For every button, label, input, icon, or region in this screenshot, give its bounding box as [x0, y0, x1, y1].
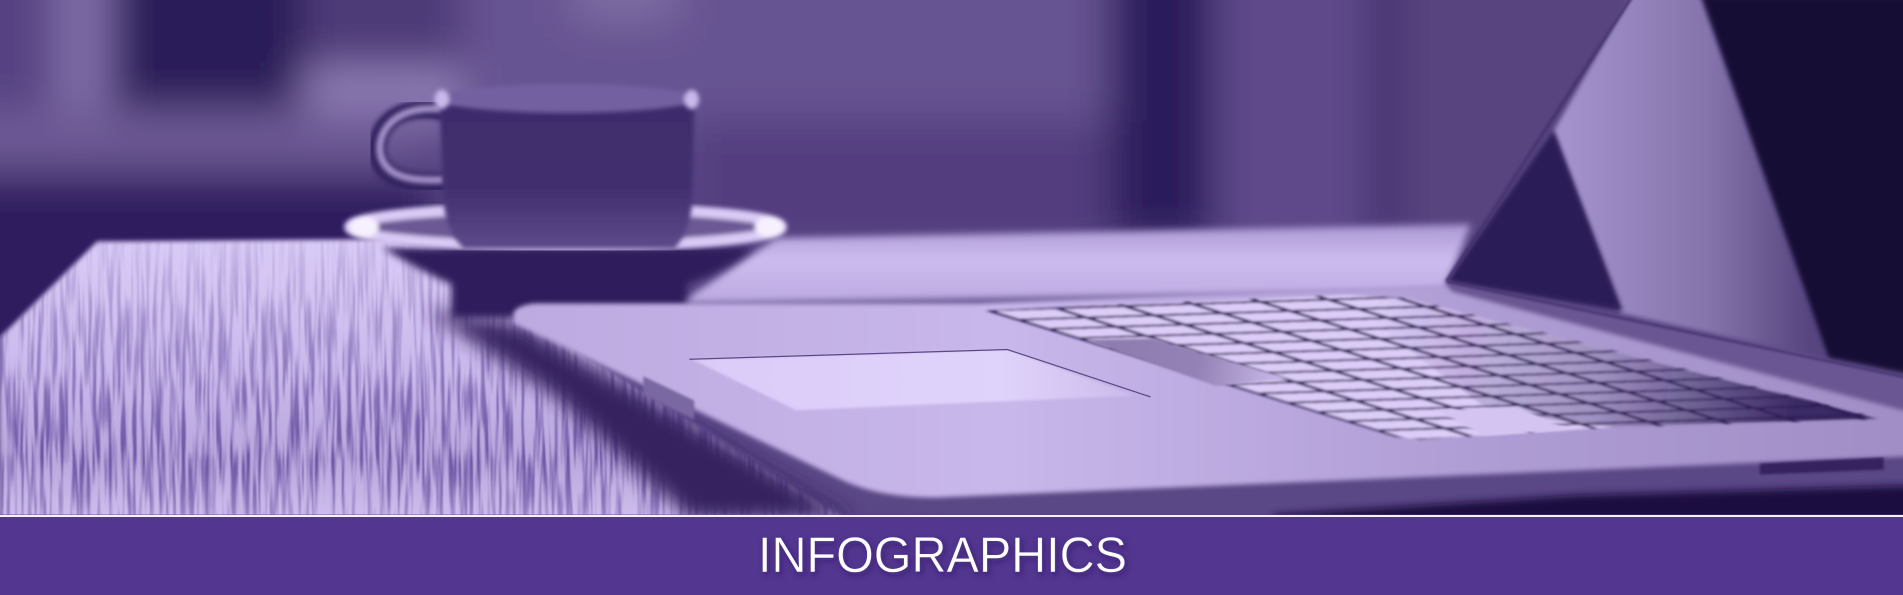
white divider line — [0, 515, 1903, 517]
hinge strip — [1447, 282, 1903, 413]
title: INFOGRAPHICS — [758, 527, 1127, 583]
shaded front side — [513, 318, 1903, 515]
key grid — [985, 295, 1879, 439]
dark screen reflection — [1447, 131, 1623, 311]
keyboard — [985, 295, 1879, 439]
top deck — [513, 285, 1903, 498]
side port notch — [643, 376, 694, 420]
large key — [1438, 407, 1568, 436]
lid edge — [1447, 0, 1634, 282]
darker bottom right — [1274, 485, 1903, 522]
saucer rim — [350, 208, 784, 246]
blurred background wall — [0, 0, 1692, 514]
coffee cup and saucer — [350, 84, 784, 318]
key shading to the right — [1396, 302, 1878, 428]
saucer underside — [382, 248, 752, 318]
wood grain — [0, 231, 874, 522]
cup rim — [434, 84, 699, 113]
laptop shadow on table — [425, 309, 856, 519]
reflected light panel — [1553, 0, 1828, 359]
title band — [0, 517, 1903, 595]
dark right side backdrop — [1699, 0, 1903, 376]
cup body — [439, 103, 694, 249]
laptop lid and screen — [1447, 0, 1828, 359]
laptop base — [513, 282, 1903, 522]
wooden tabletop — [0, 231, 874, 522]
cup handle — [377, 110, 444, 182]
trackpad — [689, 350, 1151, 410]
far table surface — [680, 225, 1471, 303]
spacebar — [1086, 339, 1289, 386]
card slot — [1760, 458, 1884, 475]
